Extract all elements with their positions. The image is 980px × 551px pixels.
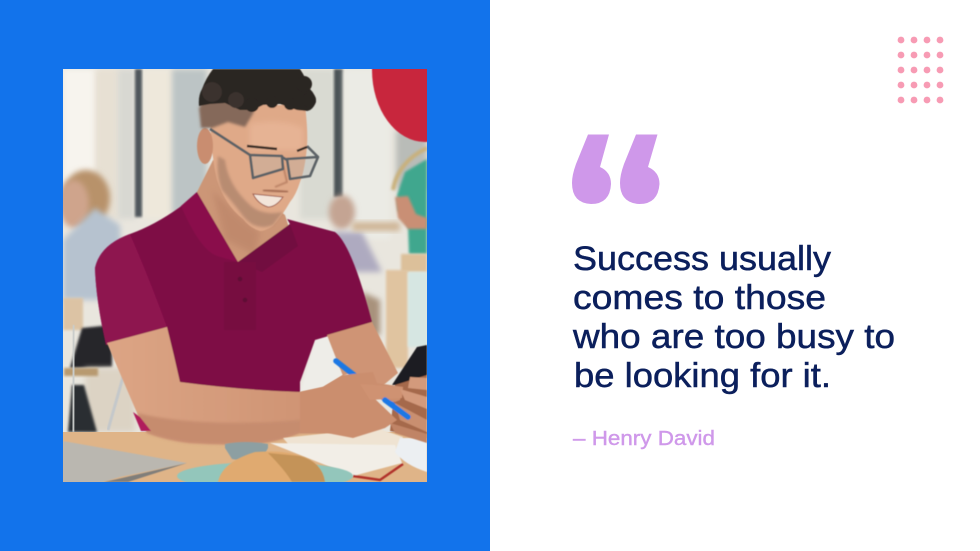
- quote text: Success usually: [573, 240, 831, 278]
- eyebrows: [247, 146, 307, 151]
- table: [63, 432, 427, 482]
- ear: [197, 128, 213, 164]
- blurred cafe background: [63, 69, 427, 432]
- hair: [199, 69, 316, 128]
- plate: [176, 462, 354, 482]
- pen tip section: [385, 400, 408, 417]
- decorative dot grid: [898, 37, 943, 103]
- quote text: [572, 240, 895, 395]
- arm on the left: [106, 326, 343, 432]
- icon: quotation marks: [572, 134, 660, 204]
- red shirt peek under arm: [133, 412, 151, 431]
- attribution: – Henry David: [573, 427, 715, 450]
- index finger over pen: [374, 393, 402, 400]
- shadowed skin behind fingers: [390, 375, 427, 440]
- fingers: [408, 377, 427, 390]
- cup: [225, 442, 268, 460]
- blue background panel: [0, 0, 490, 551]
- nose shadow: [275, 165, 287, 187]
- pen: [332, 358, 396, 405]
- notebook: [270, 428, 427, 480]
- right upper arm: [327, 322, 398, 388]
- palm: [300, 372, 403, 438]
- stubble: [218, 156, 283, 227]
- quote text: comes to those: [573, 279, 826, 317]
- polo shirt: [95, 192, 372, 395]
- photo: man at cafe table with phone: [63, 69, 427, 482]
- laptop: [63, 441, 187, 482]
- neck: [197, 160, 293, 268]
- quote text: who are too busy to: [572, 318, 895, 356]
- quote text: be looking for it.: [574, 357, 831, 395]
- phone: [392, 345, 427, 385]
- croissant: [218, 452, 325, 482]
- smile: [253, 194, 283, 207]
- face: [210, 105, 307, 231]
- phone and hand: [300, 345, 427, 443]
- glasses: [210, 129, 318, 179]
- man: [95, 69, 398, 444]
